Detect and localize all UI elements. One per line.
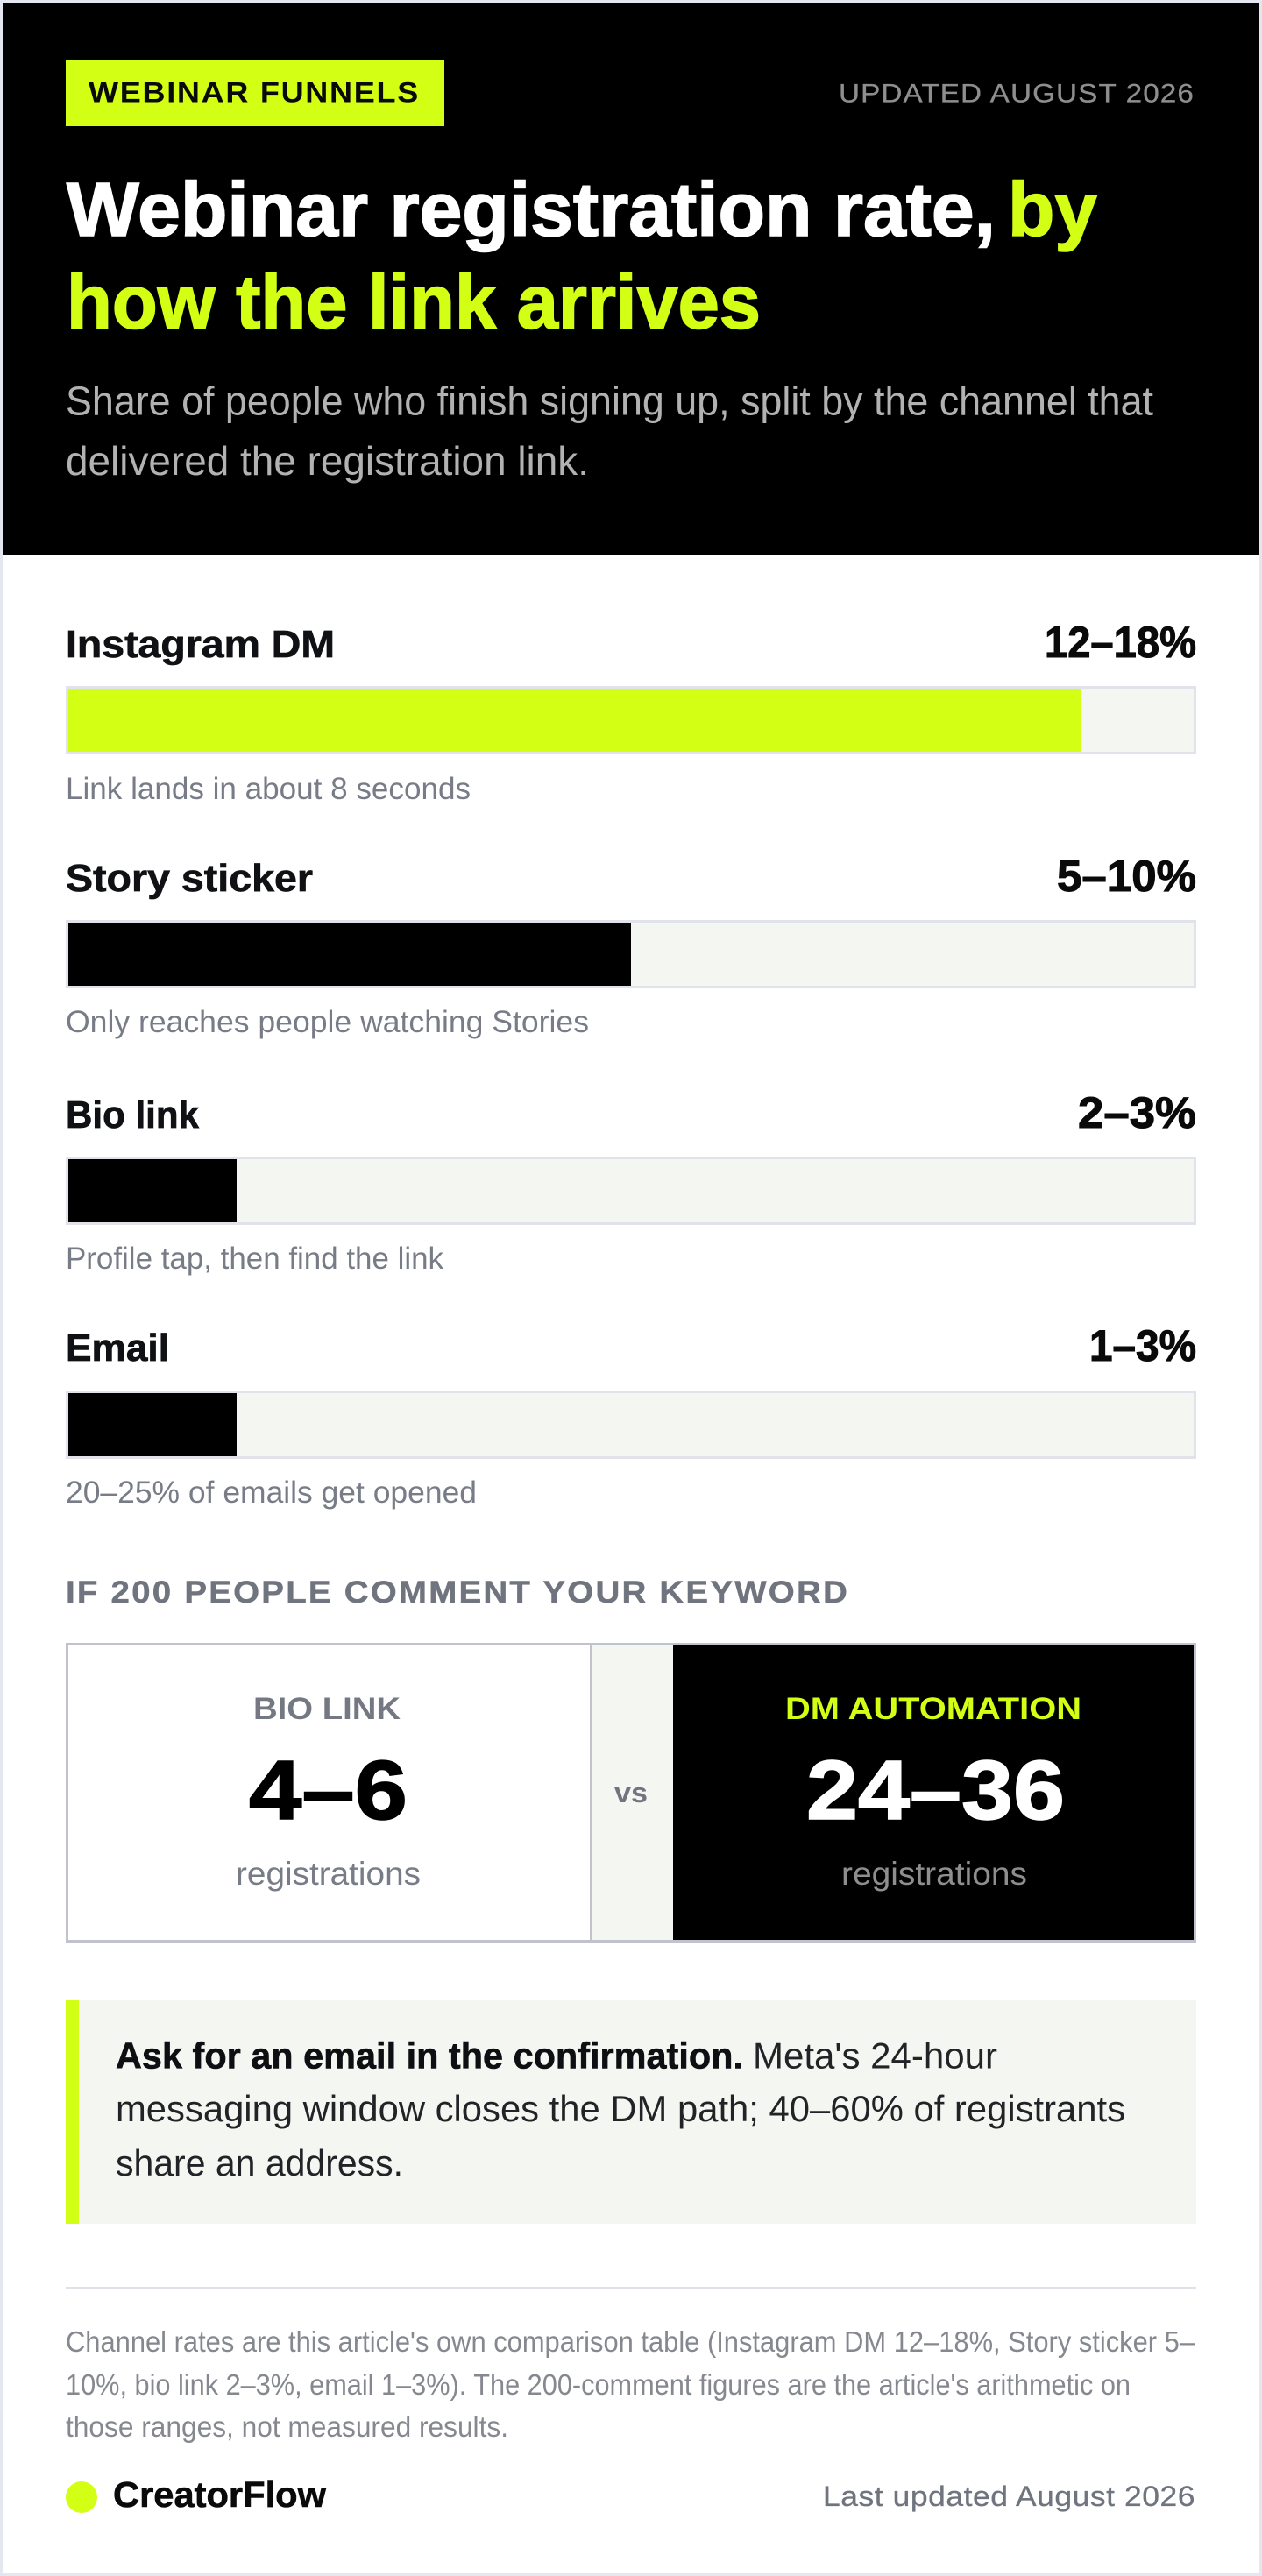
title: by — [1008, 167, 1097, 252]
panel: header — [3, 3, 1259, 555]
card: DM automation: registrations — [841, 1856, 1027, 1892]
row: Email: Email — [66, 1327, 169, 1369]
row: Bio link: Profile tap, then find the link — [66, 1242, 443, 1276]
row: Instagram DM: Link lands in about 8 seconds — [66, 772, 471, 806]
row: Story sticker: Only reaches people watching Stories — [66, 1005, 589, 1039]
panel: comparison — [67, 1644, 1195, 1942]
callout: Ask for an email in the confirmation. — [116, 2035, 743, 2077]
row: Story sticker: Story sticker — [66, 857, 313, 900]
footnote: Channel rates are this article's own comparison table (Instagram DM 12–18%, Story sticker 5– — [66, 2325, 1195, 2358]
footnote: 10%, bio link 2–3%, email 1–3%). The 200-comment figures are the article's arithmetic on — [66, 2368, 1131, 2401]
row: Bio link — [66, 1088, 1196, 1276]
row: Instagram DM: 12–18% — [1045, 618, 1196, 667]
row: Bio link: 2–3% — [1078, 1088, 1196, 1137]
title: Webinar registration rate, — [67, 167, 996, 252]
updated date: UPDATED AUGUST 2026 — [839, 79, 1195, 109]
icon: brand dot — [66, 2481, 97, 2513]
title: how the link arrives — [67, 259, 761, 345]
card: bio link: 4–6 — [249, 1744, 408, 1837]
card: DM automation — [673, 1645, 1194, 1940]
callout: Meta's 24-hour — [753, 2035, 997, 2077]
row: Instagram DM: Instagram DM — [66, 623, 335, 666]
callout: share an address. — [116, 2142, 403, 2183]
card: bio link: BIO LINK — [253, 1692, 401, 1726]
footer brand: CreatorFlow — [113, 2474, 326, 2515]
subtitle: Share of people who finish signing up, split by the channel that — [66, 379, 1153, 424]
panel: channel bars — [66, 618, 1196, 1510]
row: Bio link: Bio link — [66, 1093, 199, 1136]
card: bio link — [236, 1692, 421, 1892]
footnote: those ranges, not measured results. — [66, 2410, 508, 2443]
vs divider — [590, 1645, 673, 1940]
callout — [66, 2000, 1196, 2224]
card: DM automation: DM AUTOMATION — [785, 1692, 1081, 1726]
row: Instagram DM — [66, 618, 1196, 806]
badge: webinar funnels: WEBINAR FUNNELS — [89, 77, 420, 109]
row: Email — [66, 1321, 1196, 1510]
section heading: IF 200 PEOPLE COMMENT YOUR KEYWORD — [66, 1575, 849, 1610]
card: DM automation: 24–36 — [806, 1744, 1065, 1837]
subtitle: delivered the registration link. — [66, 438, 589, 484]
vs divider: vs — [614, 1777, 648, 1808]
row: Story sticker: 5–10% — [1057, 852, 1196, 901]
subtitle — [66, 379, 1153, 484]
title — [67, 167, 1097, 345]
footnote — [66, 2325, 1195, 2443]
row: Email: 1–3% — [1089, 1321, 1196, 1370]
row: Story sticker — [66, 852, 1196, 1039]
last updated: Last updated August 2026 — [823, 2480, 1195, 2512]
row: Email: 20–25% of emails get opened — [66, 1476, 477, 1510]
callout: messaging window closes the DM path; 40–60% of registrants — [116, 2088, 1125, 2129]
card: bio link: registrations — [236, 1856, 421, 1892]
badge: webinar funnels — [66, 60, 444, 126]
